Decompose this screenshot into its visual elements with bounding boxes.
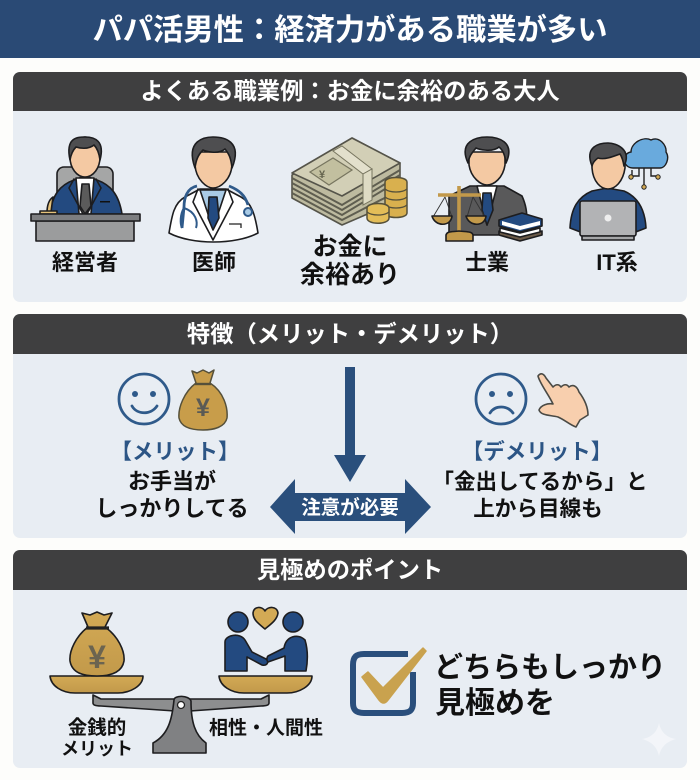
icon: IT worker with laptop and cloud	[570, 139, 668, 240]
demerit text	[432, 439, 648, 521]
label: executive: 経営者	[52, 250, 118, 275]
heading: features: 特徴（メリット・デメリット）	[187, 320, 513, 347]
conclusion text	[434, 651, 666, 720]
panel: key points	[13, 550, 687, 768]
heading: occupations	[13, 72, 687, 111]
arrow: caution both ways: 注意が必要	[301, 496, 399, 519]
label: spare money: お金に	[312, 233, 388, 261]
icon: pointing hand	[538, 374, 588, 427]
icon: check box	[353, 648, 426, 713]
title	[0, 0, 700, 58]
arrow: down	[334, 367, 366, 482]
icon: money bag on scale	[70, 612, 124, 676]
icon: doctor	[169, 137, 258, 242]
label: licensed professional: 士業	[465, 250, 509, 275]
merit text: お手当が	[128, 469, 216, 494]
merit text: 【メリット】	[110, 440, 240, 464]
merit text	[95, 440, 249, 521]
icon: money bag	[179, 370, 227, 430]
icon: lawyer with scales and books	[432, 137, 542, 241]
icon: money stacks and coins: ¥	[319, 169, 326, 181]
icon: smile	[119, 374, 169, 424]
icon: sparkle	[642, 723, 676, 756]
icon: money stacks and coins	[292, 138, 407, 225]
merit text: しっかりしてる	[95, 496, 249, 521]
conclusion text: 見極めを	[435, 687, 555, 720]
title: パパ活男性：経済力がある職業が多い	[92, 12, 608, 47]
panel: occupations	[13, 72, 687, 302]
label: spare money: 余裕あり	[300, 261, 400, 289]
label: spare money	[300, 233, 400, 289]
label: doctor: 医師	[192, 250, 236, 275]
icon: money bag on scale: ¥	[88, 639, 106, 675]
icon: sad face	[476, 374, 526, 424]
arrow: caution both ways	[270, 479, 431, 534]
label: monetary merit: メリット	[61, 739, 133, 759]
icon: executive at desk	[31, 137, 140, 241]
heading: key points: 見極めのポイント	[257, 557, 443, 583]
demerit text: 【デメリット】	[462, 439, 612, 464]
icon: money bag: ¥	[196, 394, 210, 422]
label: monetary merit	[61, 717, 133, 759]
label: compatibility: 相性・人間性	[209, 717, 323, 739]
heading: features	[13, 314, 687, 354]
conclusion text: どちらもしっかり	[434, 651, 666, 684]
label: monetary merit: 金銭的	[68, 717, 126, 739]
demerit text: 「金出してるから」と	[432, 469, 648, 494]
icon: balance scale	[50, 607, 312, 753]
label: IT: IT系	[596, 250, 638, 275]
heading: key points	[13, 550, 687, 590]
heading: occupations: よくある職業例：お金に余裕のある大人	[140, 78, 560, 104]
icon: handshake and heart	[225, 607, 307, 671]
demerit text: 上から目線も	[473, 496, 603, 521]
panel: features	[13, 314, 687, 538]
